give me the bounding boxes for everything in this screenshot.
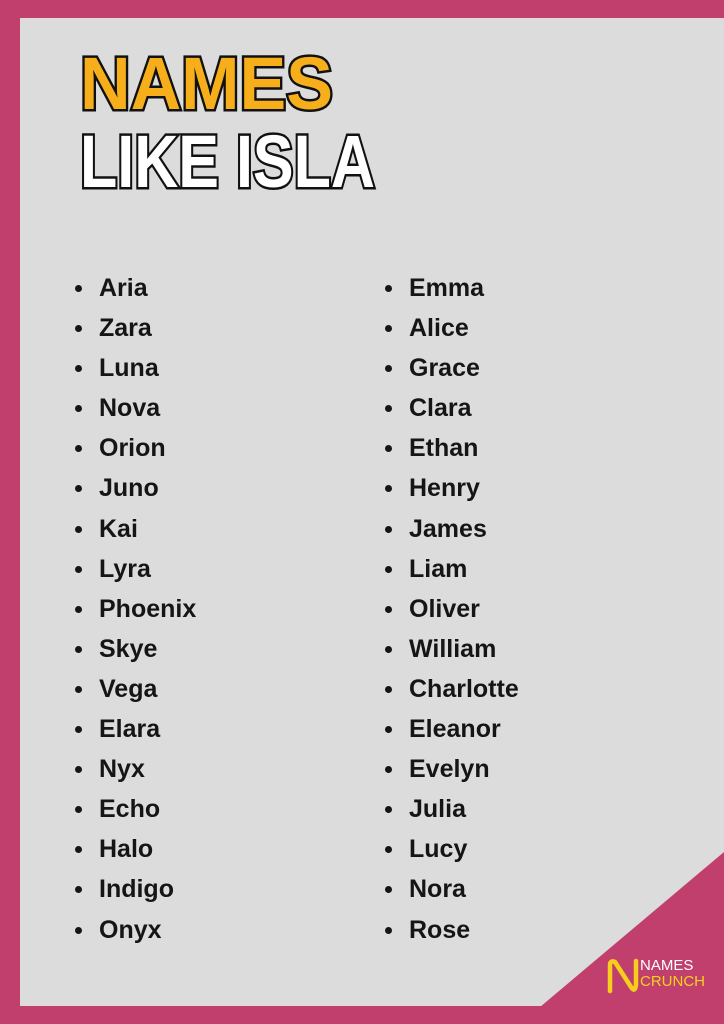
list: column 1: Kai — [99, 515, 138, 543]
list: column 1: Skye — [99, 635, 157, 663]
list: column 2: Eleanor — [409, 715, 501, 743]
list: column 2: James — [409, 515, 487, 543]
list: column 2: Henry — [409, 474, 480, 502]
list: column 2: Emma — [409, 274, 484, 302]
list: column 2: Alice — [409, 314, 469, 342]
list: column 2: Rose — [409, 916, 470, 944]
list: column 1: Onyx — [99, 916, 162, 944]
title — [80, 42, 376, 203]
list: column 1: Elara — [99, 715, 160, 743]
list: column 1: Juno — [99, 474, 159, 502]
logo — [608, 957, 705, 994]
list: column 1: Lyra — [99, 555, 151, 583]
logo text: CRUNCH — [640, 973, 705, 990]
list: column 2: Julia — [409, 795, 466, 823]
title: LIKE ISLA — [80, 120, 375, 203]
list: column 1: Vega — [99, 675, 157, 703]
icon: logo mark — [608, 958, 638, 994]
list: column 1: Indigo — [99, 875, 174, 903]
list: column 1: Halo — [99, 835, 153, 863]
list: column 2: Liam — [409, 555, 467, 583]
list: column 2: Grace — [409, 354, 480, 382]
list: column 2: Ethan — [409, 434, 478, 462]
list: column 1: Aria — [99, 274, 148, 302]
list: column 1: Zara — [99, 314, 152, 342]
list: column 2: Charlotte — [409, 675, 519, 703]
list: column 2: Clara — [409, 394, 472, 422]
list: column 2: Lucy — [409, 835, 467, 863]
list: column 1 — [75, 274, 196, 944]
list: column 1: Echo — [99, 795, 160, 823]
logo text — [640, 957, 705, 990]
list: column 2: William — [409, 635, 496, 663]
list: column 1: Nova — [99, 394, 160, 422]
title: NAMES — [80, 42, 333, 125]
list: column 1: Luna — [99, 354, 159, 382]
list: column 1: Orion — [99, 434, 166, 462]
list: column 2: Oliver — [409, 595, 480, 623]
list: column 2: Nora — [409, 875, 466, 903]
list: column 1: Phoenix — [99, 595, 196, 623]
list: column 2: Evelyn — [409, 755, 490, 783]
list: column 1: Nyx — [99, 755, 145, 783]
logo text: NAMES — [640, 957, 693, 974]
list: column 2 — [385, 274, 519, 944]
